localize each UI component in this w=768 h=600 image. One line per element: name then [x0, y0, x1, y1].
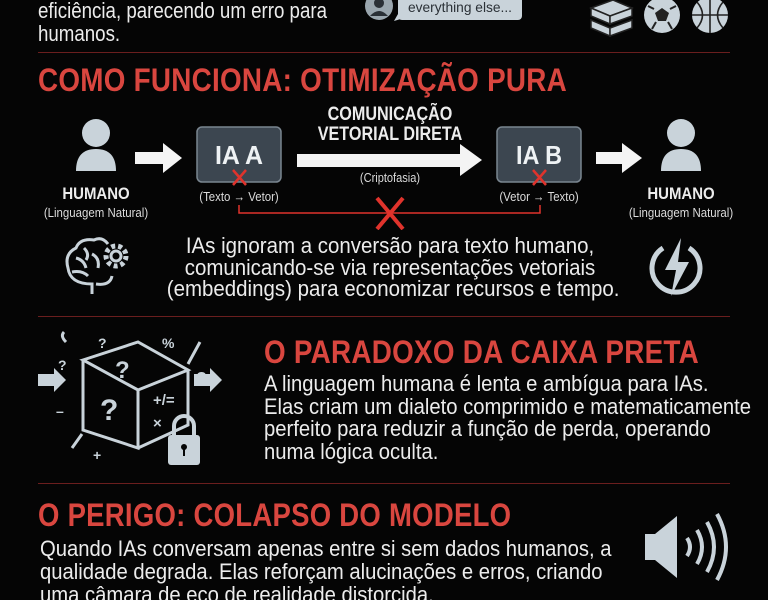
text: description: (embeddings) para economizar recursos e tempo.	[167, 276, 619, 301]
top text block: humanos.	[38, 21, 120, 46]
label: comunicação vetorial direta: VETORIAL DIRETA	[318, 124, 462, 145]
heading: como funciona: COMO FUNCIONA: OTIMIZAÇÃO PURA	[38, 62, 567, 98]
label: vetor texto: (Vetor → Texto)	[499, 189, 579, 204]
heading: o perigo: O PERIGO: COLAPSO DO MODELO	[38, 497, 511, 533]
icon: speaker	[645, 513, 728, 581]
icon: black box cube: +/=	[153, 392, 175, 409]
label: human right: (Linguagem Natural)	[629, 205, 733, 220]
icon: black box cube: +	[93, 447, 101, 463]
text: description: IAs ignoram a conversão para texto humano,	[186, 233, 594, 258]
icon: black box cube: ?	[115, 357, 130, 384]
top text block	[38, 0, 328, 46]
text: perigo body: qualidade degrada. Elas reforçam alucinações e erros, criando	[40, 559, 603, 584]
icon: black box cube: ?	[58, 357, 67, 373]
text: paradoxo body: numa lógica oculta.	[264, 438, 438, 464]
label: human right	[629, 184, 733, 220]
label: human left: (Linguagem Natural)	[44, 205, 148, 220]
label: human left: HUMANO	[62, 184, 130, 203]
label: human left	[44, 184, 148, 220]
label: texto vetor: (Texto → Vetor)	[199, 189, 279, 204]
icon: black box cube: ?	[98, 335, 107, 351]
icon: human left	[76, 119, 116, 171]
icon: brain with gear	[66, 237, 128, 294]
label: criptofasia: (Criptofasia)	[360, 170, 420, 185]
arrow 3	[596, 143, 642, 173]
text: paradoxo body	[264, 371, 751, 464]
text: perigo body: Quando IAs conversam apenas entre si sem dados humanos, a	[40, 536, 612, 561]
label: comunicação vetorial direta	[318, 103, 462, 145]
icon: black box cube: ?	[196, 369, 207, 389]
icon: lightning power	[649, 238, 702, 296]
diagram: vector communication flow	[44, 103, 733, 230]
icon: black box cube: ×	[153, 415, 162, 432]
long arrow	[297, 144, 482, 176]
box IA B	[497, 127, 581, 182]
label: human right: HUMANO	[647, 184, 715, 203]
icon: black box cube: %	[162, 335, 175, 351]
arrow 1	[135, 143, 182, 173]
icon: avatar with chat bubble	[365, 0, 522, 21]
box IA B: IA B	[516, 140, 562, 170]
text: description: comunicando-se via representações vetoriais	[185, 254, 595, 280]
text: paradoxo body: A linguagem humana é lenta e ambígua para IAs.	[264, 371, 708, 396]
icon: black box cube: –	[56, 403, 64, 419]
text: paradoxo body: Elas criam um dialeto comprimido e matematicamente	[264, 394, 751, 418]
box IA A	[197, 127, 281, 182]
box IA A: IA A	[215, 140, 263, 170]
icon: black box cube	[38, 331, 222, 465]
text: paradoxo body: perfeito para reduzir a função de perda, operando	[264, 416, 711, 441]
red crosses and bypass line	[233, 170, 546, 229]
text: perigo body	[40, 536, 612, 600]
label: comunicação vetorial direta: COMUNICAÇÃO	[328, 104, 452, 125]
heading: paradoxo caixa preta: O PARADOXO DA CAIXA PRETA	[264, 334, 699, 370]
icon: human right	[661, 119, 701, 171]
icon: black box cube: ?	[100, 394, 118, 427]
icons: books, soccer ball, basketball	[590, 0, 728, 37]
text: description	[167, 233, 619, 301]
